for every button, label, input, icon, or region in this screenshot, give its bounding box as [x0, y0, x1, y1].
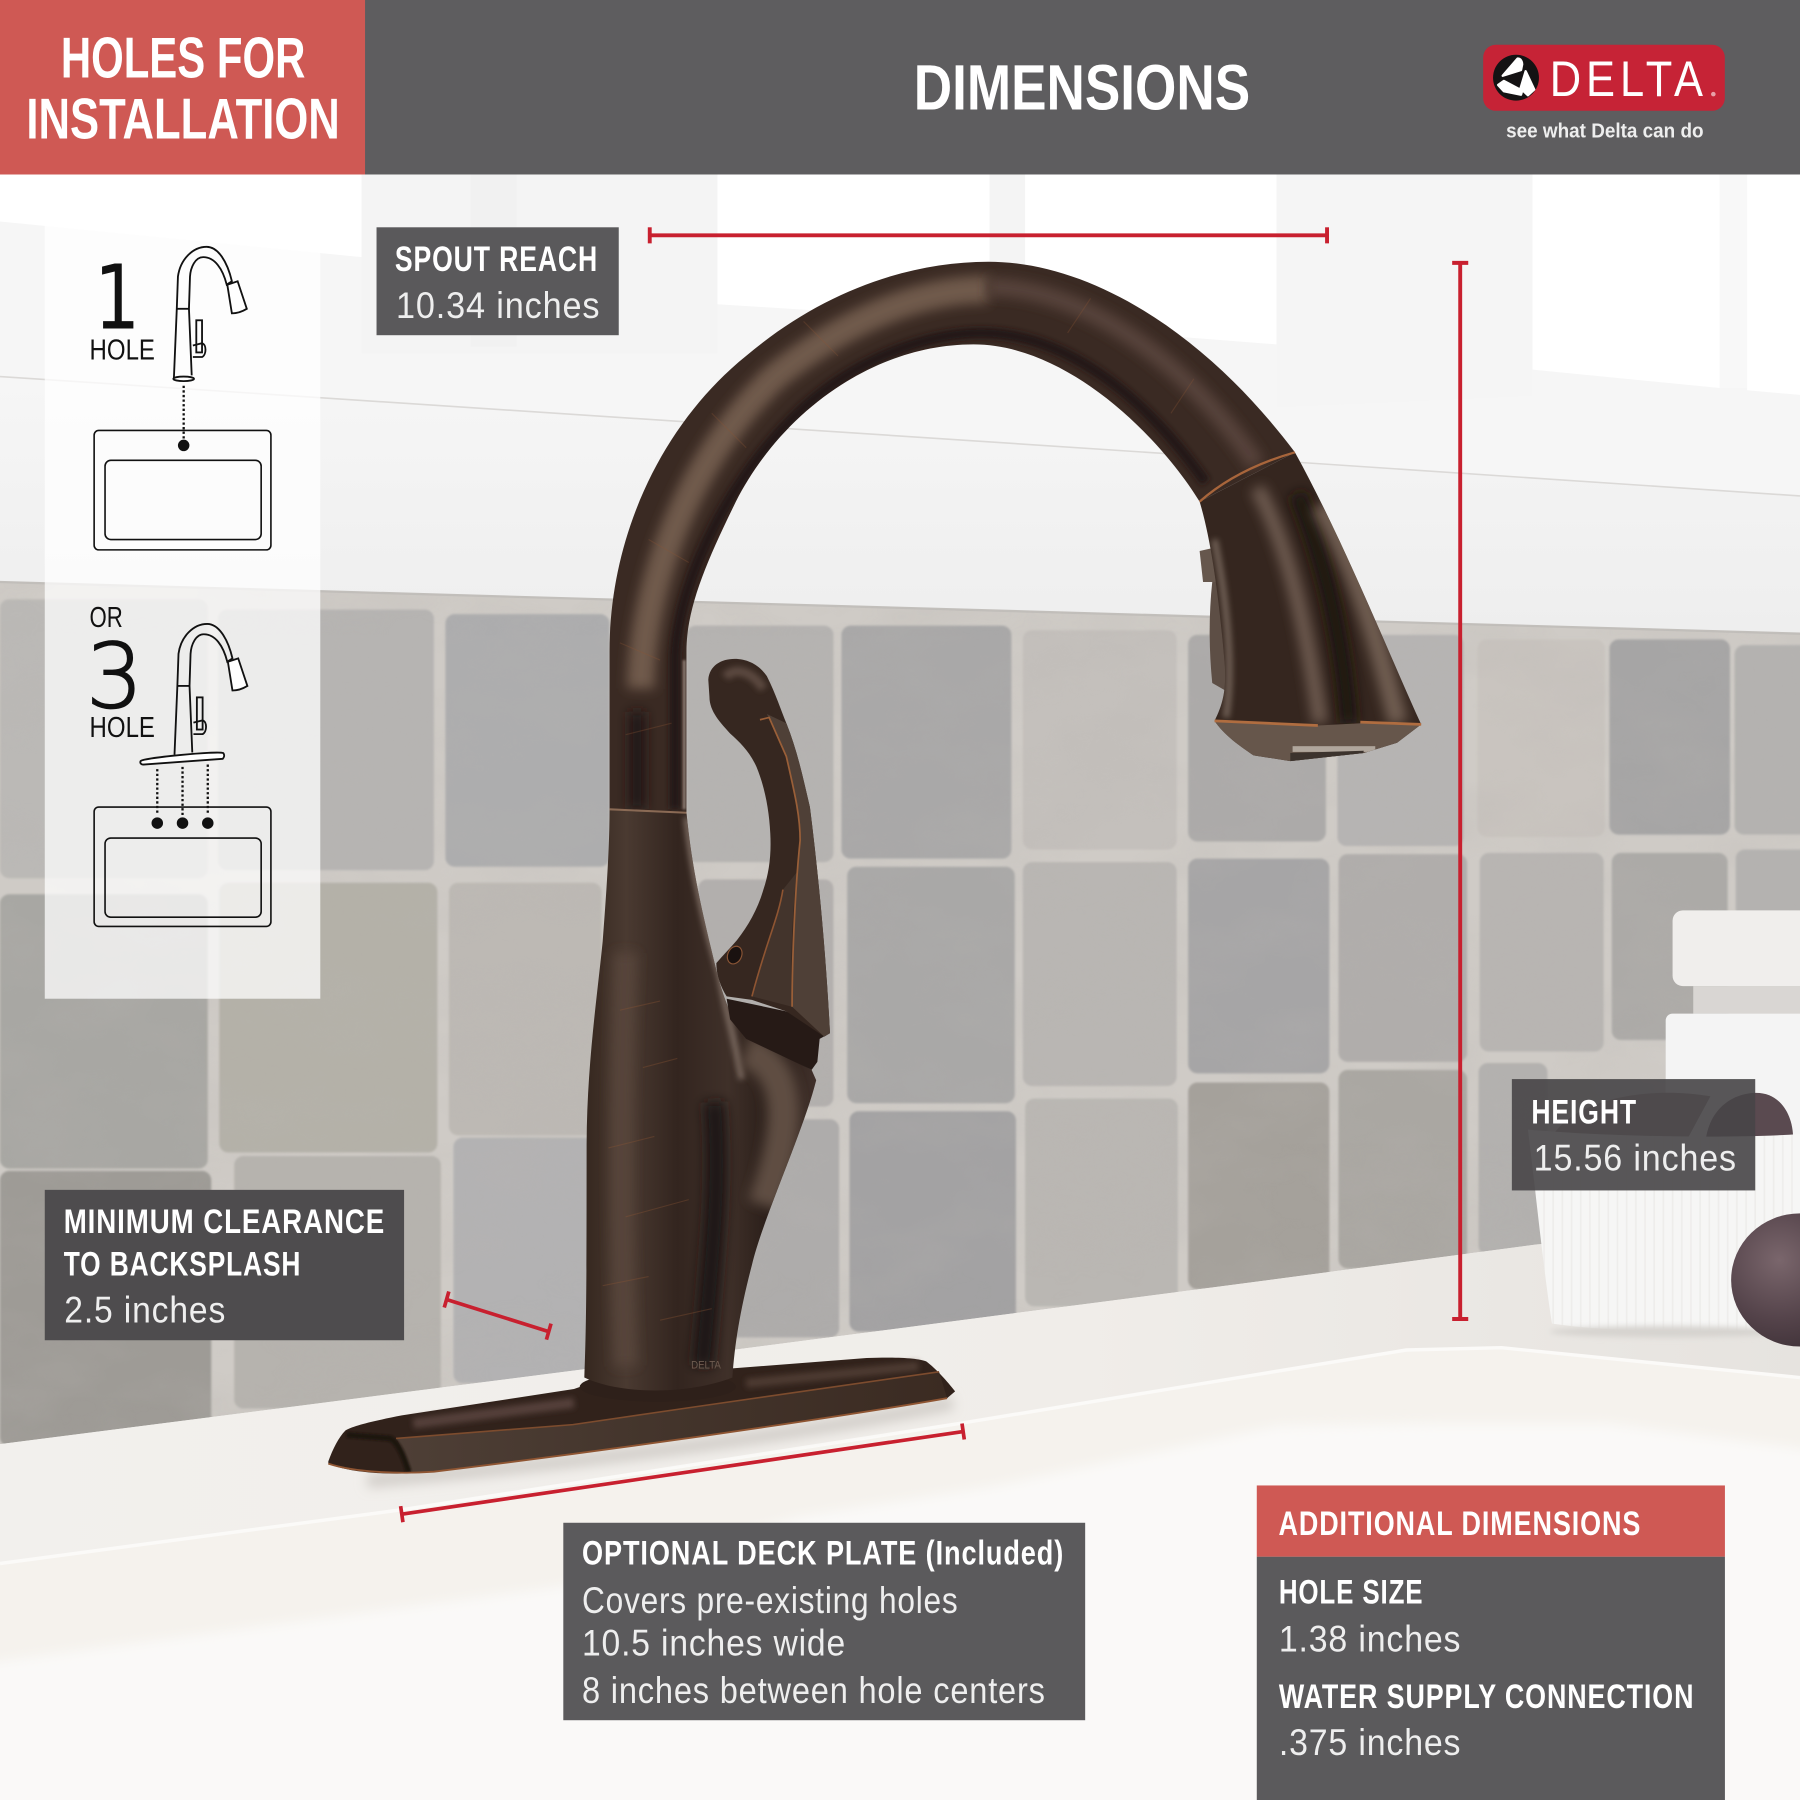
dimension arrow: backsplash clearance: [444, 1291, 551, 1340]
dotted connectors, three holes: [157, 765, 208, 815]
callout: minimum clearance: MINIMUM CLEARANCE: [64, 1203, 385, 1241]
header panel: holes for installation: HOLES FOR: [61, 26, 305, 90]
label: one hole: HOLE: [90, 334, 155, 366]
dimension arrow: spout reach: [650, 227, 1327, 243]
faucet spray head: [1200, 452, 1423, 769]
faucet pull-down spout neck: [610, 262, 1295, 813]
icon: sink, one hole: [94, 430, 271, 550]
Delta logo: [1483, 45, 1725, 142]
water supply connection: [1279, 1678, 1694, 1763]
header panel: holes for installation: INSTALLATION: [26, 87, 340, 151]
callout: optional deck plate: OPTIONAL DECK PLATE (Included): [582, 1535, 1064, 1573]
hole size: 1.38 inches: [1279, 1619, 1461, 1660]
callout: optional deck plate: Covers pre-existing holes: [582, 1580, 959, 1621]
three hole numeral: 3: [86, 625, 143, 729]
dimension arrow: deck plate width: [401, 1423, 964, 1522]
callout: minimum clearance: TO BACKSPLASH: [64, 1245, 301, 1283]
icon: sink, three holes: [94, 807, 271, 926]
callout: minimum clearance: [45, 1190, 404, 1340]
callout: optional deck plate: [563, 1523, 1085, 1720]
faucet deck plate: [328, 1358, 955, 1481]
callout: spout reach: SPOUT REACH: [395, 239, 598, 279]
faucet spray button: [1200, 548, 1228, 692]
callout: spout reach: 10.34 inches: [396, 285, 600, 326]
panel: hole options: [45, 222, 320, 999]
additional dimensions heading: [1257, 1485, 1725, 1557]
callout: spout reach: [377, 227, 619, 335]
faucet body: DELTA: [691, 1359, 721, 1371]
one hole numeral: 1: [94, 246, 140, 350]
hole size: [1279, 1574, 1461, 1660]
callout: height: HEIGHT: [1531, 1093, 1637, 1131]
callout: height: [1512, 1079, 1755, 1190]
dimension arrow: height: [1452, 262, 1468, 1320]
header bar: [0, 0, 1800, 174]
header panel: holes for installation: [0, 0, 365, 174]
background objects: white bowl, jar and plums: [1528, 910, 1800, 1347]
hole size: HOLE SIZE: [1279, 1574, 1423, 1612]
callout: optional deck plate: 10.5 inches wide: [582, 1622, 846, 1663]
label: or: OR: [90, 602, 123, 634]
Delta logo: DELTA: [1550, 50, 1708, 107]
label: three hole: HOLE: [90, 712, 155, 744]
callout: optional deck plate: 8 inches between hole centers: [582, 1670, 1046, 1711]
icon: faucet, one hole: [173, 247, 247, 381]
heading: dimensions: DIMENSIONS: [914, 52, 1250, 124]
Delta logo: see what Delta can do: [1506, 119, 1704, 142]
dotted connector, one hole: [183, 386, 185, 440]
callout: height: 15.56 inches: [1534, 1137, 1737, 1178]
faucet lever handle: [708, 659, 830, 1070]
faucet illustration: [328, 262, 1423, 1481]
faucet body: [584, 808, 816, 1390]
faucet base collar: [580, 1372, 736, 1402]
water supply connection: WATER SUPPLY CONNECTION: [1279, 1678, 1694, 1716]
icon: faucet with deck plate, three hole: [140, 624, 247, 765]
panel: additional dimensions: [1257, 1485, 1725, 1800]
water supply connection: .375 inches: [1279, 1722, 1461, 1763]
additional dimensions heading: ADDITIONAL DIMENSIONS: [1278, 1505, 1641, 1543]
callout: minimum clearance: 2.5 inches: [64, 1289, 226, 1330]
